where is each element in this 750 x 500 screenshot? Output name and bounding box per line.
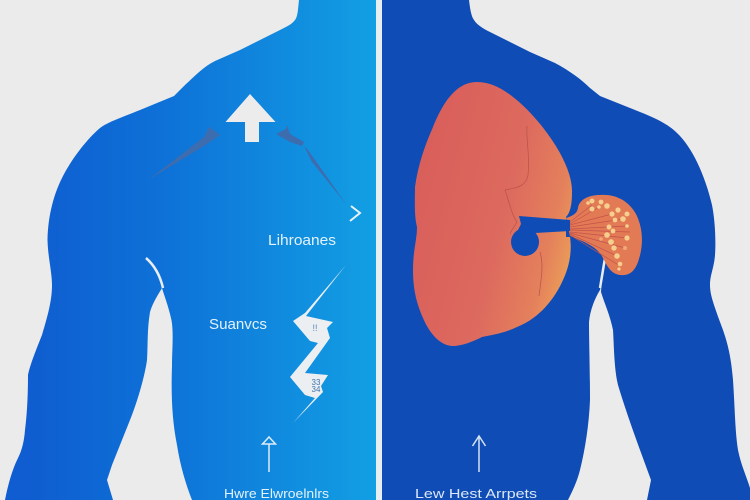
icon: white up arrow	[226, 94, 276, 142]
armpit highlight stroke	[146, 258, 163, 288]
panel: lung illustration	[413, 82, 642, 346]
icon: lightning shape with marks	[290, 265, 346, 423]
label: upper right of left panel: Lihroanes	[268, 233, 336, 249]
icon: lightning shape with marks: 34	[312, 385, 321, 394]
icon: small chevron	[350, 206, 360, 221]
vessel lines	[505, 126, 542, 296]
arrow: left bottom up arrow	[262, 437, 276, 472]
panel: right body silhouette	[382, 0, 750, 500]
arrow: right bottom up arrow	[472, 436, 486, 472]
arrow: right dark wedge	[276, 125, 346, 204]
gland vessels	[570, 205, 630, 266]
icon: lightning shape with marks: 33	[312, 378, 321, 387]
label: middle of left panel: Suanvcs	[209, 317, 267, 333]
center divider	[376, 0, 382, 500]
main lung	[413, 82, 572, 346]
armpit highlight stroke: right	[600, 258, 605, 288]
gland nodules	[586, 198, 630, 271]
small gland	[566, 195, 642, 275]
icon: lightning shape with marks: !!	[312, 323, 318, 333]
panel: left body silhouette	[5, 0, 376, 500]
arrow: left dark wedge	[148, 127, 220, 180]
hole and channel	[511, 216, 570, 256]
